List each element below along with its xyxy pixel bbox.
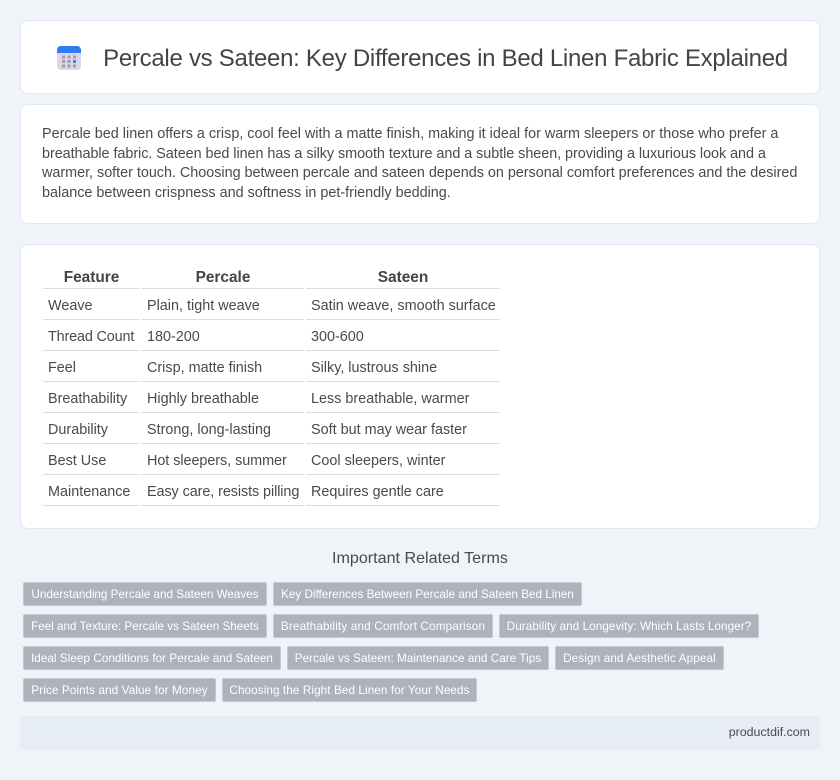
row: maintenance: Maintenance [48,484,130,500]
row: breathability: Less breathable, warmer [311,391,469,407]
related terms tags: Breathability and Comfort Comparison [281,620,485,633]
related terms tags: Key Differences Between Percale and Sateen Bed Linen [281,588,574,601]
row: feel: Feel [48,360,76,376]
row: best use: Best Use [48,453,106,469]
row: maintenance [48,484,444,500]
table header: Sateen [378,269,428,286]
row: weave: Weave [48,298,93,314]
heading: related terms: Important Related Terms [332,549,508,567]
row: breathability: Breathability [48,391,127,407]
related terms tags: Durability and Longevity: Which Lasts Longer? [507,620,751,633]
row: feel [48,360,437,376]
row: weave: Plain, tight weave [147,298,260,314]
intro paragraph: breathable fabric. Sateen bed linen has a silky smooth texture and a subtle sheen, providing a luxurious look and a [42,146,766,162]
related terms tags: Price Points and Value for Money [31,684,208,697]
panel: header [20,20,820,94]
panel: comparison table [20,244,820,529]
row: durability: Durability [48,422,108,438]
icon: calendar [57,46,81,70]
row: maintenance: Easy care, resists pilling [147,484,299,500]
row: thread count: 180-200 [147,329,200,345]
related terms tags: Percale vs Sateen: Maintenance and Care Tips [295,652,541,665]
footer [20,716,820,750]
row: durability: Soft but may wear faster [311,422,467,438]
row: breathability [48,391,470,407]
row: thread count [48,329,364,345]
row: durability: Strong, long-lasting [147,422,271,438]
intro paragraph [42,126,797,200]
table header [64,269,428,286]
row: weave: Satin weave, smooth surface [311,298,496,314]
row: best use: Cool sleepers, winter [311,453,445,469]
related terms tags: Feel and Texture: Percale vs Sateen Sheets [31,620,259,633]
row: breathability: Highly breathable [147,391,259,407]
row: thread count: Thread Count [48,329,134,345]
title: Percale vs Sateen: Key Differences in Bed Linen Fabric Explained [103,45,788,72]
row: feel: Crisp, matte finish [147,360,262,376]
row: durability [48,422,467,438]
row: feel: Silky, lustrous shine [311,360,437,376]
related terms tags [23,582,759,702]
table header: Percale [196,269,250,286]
table header: Feature [64,269,119,286]
intro paragraph: warmer, softer touch. Choosing between percale and sateen depends on personal comfort preferences and the desired [42,165,797,181]
footer source text: productdif.com [729,725,810,739]
intro paragraph: balance between crispness and softness in pet-friendly bedding. [42,184,451,200]
related terms tags: Choosing the Right Bed Linen for Your Needs [229,684,470,697]
row: best use [48,453,446,469]
row: best use: Hot sleepers, summer [147,453,287,469]
row: weave [48,298,496,314]
related terms tags: Ideal Sleep Conditions for Percale and Sateen [31,652,273,665]
row: thread count: 300-600 [311,329,364,345]
row: maintenance: Requires gentle care [311,484,444,500]
related terms tags: Understanding Percale and Sateen Weaves [31,588,259,601]
panel: introduction [20,104,820,224]
related terms tags: Design and Aesthetic Appeal [563,652,716,665]
intro paragraph: Percale bed linen offers a crisp, cool feel with a matte finish, making it ideal for warm sleepers or those who prefer a [42,126,778,142]
